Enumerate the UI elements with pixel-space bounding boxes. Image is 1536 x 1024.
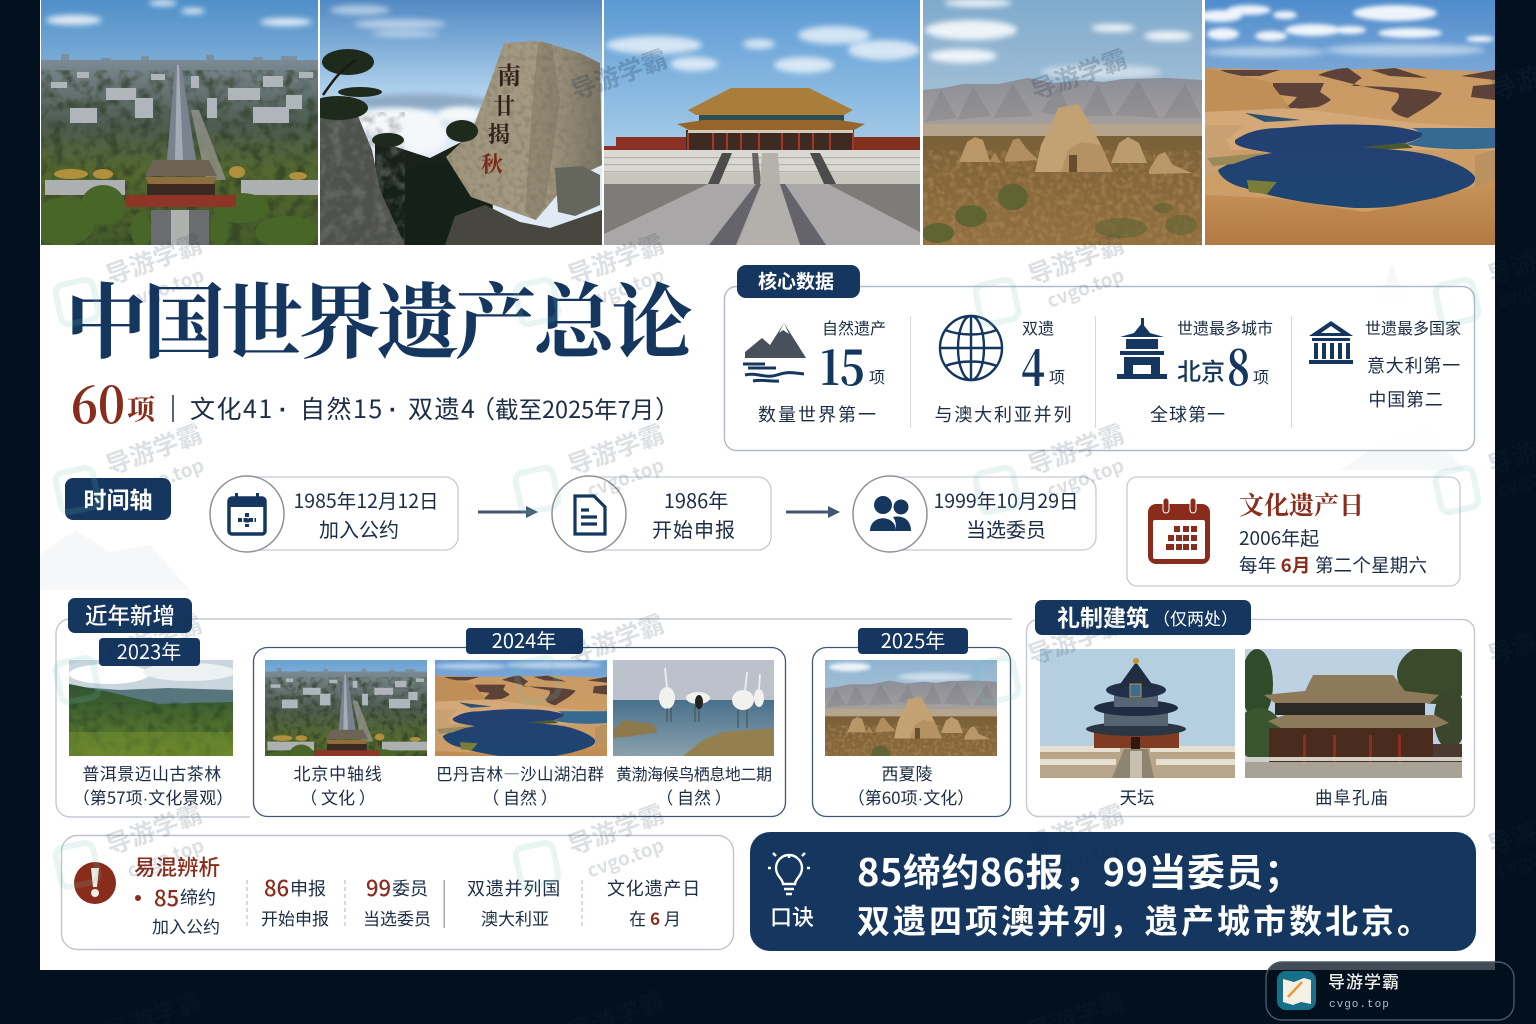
timeline step 1986: 1986年 [664, 485, 728, 514]
photo: central axis thumbnail [259, 636, 428, 781]
stat: natural heritage: 数量世界第一 [758, 401, 876, 427]
faint ink mountains background [40, 262, 1465, 590]
panel: easily confused: 澳大利亚 [481, 905, 549, 930]
photo: Mount Tai rock: 南 [497, 56, 521, 91]
panel: ritual architecture: 曲阜孔庙 [1315, 785, 1389, 810]
timeline step 1985 [210, 476, 458, 552]
watermarks: 导游学霸 [1022, 414, 1129, 483]
watermarks: 导游学霸 [1022, 604, 1129, 673]
panel: ritual architecture: 天坛 [1120, 785, 1154, 810]
summary line: 60 items: 项 [127, 388, 157, 428]
tag: core data [737, 265, 860, 298]
stat: top city: 北京 [1177, 352, 1225, 387]
photo: Western Xia thumbnail [824, 632, 997, 784]
panel: 2024 additions [254, 625, 786, 816]
stat: top city: 全球第一 [1150, 401, 1226, 427]
icon: warning [74, 862, 116, 904]
brand badge [1266, 962, 1514, 1020]
summary line: 60 items: · [389, 396, 397, 424]
watermarks: 导游学霸 [100, 794, 207, 863]
icon: mountain [743, 323, 806, 381]
panel: culture heritage day: 文化遗产日 [1239, 486, 1364, 522]
panel: easily confused: 开始申报 [261, 905, 329, 930]
stat: top country: 世遗最多国家 [1365, 315, 1461, 339]
icon: document [575, 496, 605, 534]
photo: dunes thumbnail [431, 635, 607, 781]
panel: easily confused: 易混辨析 [134, 851, 220, 882]
icon: pagoda [1117, 318, 1167, 379]
stat: natural heritage: 自然遗产 [822, 315, 886, 339]
summary line: 60 items: 文化41 [190, 390, 274, 426]
watermarks: cvgo.top [1043, 451, 1128, 504]
timeline step 1986: 开始申报 [652, 514, 736, 543]
photo: Badain Jaran dunes and lake [1198, 0, 1495, 245]
stat: top city: 8 [1227, 330, 1250, 399]
tag: core data: 核心数据 [758, 267, 834, 294]
arrow [786, 506, 840, 518]
summary line: 60 items: 自然15 [300, 390, 384, 426]
summary line: 60 items: · [279, 396, 287, 424]
tag: 2024 [466, 625, 583, 654]
brand badge: cvgo.top [1329, 999, 1390, 1011]
stat: mixed heritage: 4 [1021, 330, 1045, 399]
panel: 2025 additions: （第60项·文化） [848, 784, 974, 809]
photo: Temple of Heaven [1040, 649, 1235, 778]
panel: easily confused: 86 [264, 871, 289, 903]
stat: top city: 世遗最多城市 [1177, 315, 1273, 339]
panel: culture heritage day [1127, 477, 1460, 586]
photo: Jingmai tea forest [69, 660, 233, 756]
watermarks: cvgo.top [583, 261, 668, 314]
icon: people [870, 496, 911, 531]
watermarks: 导游学霸 [100, 414, 207, 483]
panel: 2025 additions: 西夏陵 [882, 760, 932, 785]
summary line: 60 items: ） [655, 390, 680, 426]
panel: mnemonic: 口诀 [770, 900, 814, 932]
panel: easily confused: 申报 [290, 875, 326, 901]
stat: natural heritage: 项 [869, 364, 885, 388]
panel: mnemonic: 双遗四项澳并列，遗产城市数北京。 [857, 895, 1430, 943]
panel: 2025 additions [812, 625, 1010, 816]
tag: ritual architecture: （仅两处） [1153, 605, 1238, 630]
panel: culture heritage day: 每年 6月 第二个星期六 [1239, 552, 1427, 578]
panel: easily confused: 文化遗产日 [607, 875, 701, 901]
watermarks: 导游学霸 [1022, 794, 1129, 863]
photo: Mount Tai rock: 秋 [481, 148, 503, 179]
watermarks: 导游学霸 [562, 414, 669, 483]
panel: easily confused: 委员 [392, 875, 428, 901]
panel: easily confused: 在 6 月 [629, 905, 681, 930]
panel: 2024 additions: 巴丹吉林—沙山湖泊群 [436, 761, 604, 785]
stat: mixed heritage [934, 315, 1072, 427]
panel: culture heritage day: 2006年起 [1239, 524, 1319, 551]
stat: mixed heritage: 与澳大利亚并列 [934, 401, 1072, 427]
tag: 2025 [858, 625, 968, 654]
stat: natural heritage: 15 [820, 330, 865, 399]
icon: globe [940, 316, 1002, 380]
arrow [478, 506, 538, 518]
panel: easily confused: 缔约 [180, 884, 216, 910]
watermarks: 导游学霸 [562, 224, 669, 293]
watermarks: cvgo.top [583, 451, 668, 504]
photo: Western Xia tombs [922, 0, 1202, 245]
photo: Mount Tai rock: 廿 [493, 90, 515, 121]
watermarks: 导游学霸 [100, 604, 207, 673]
group: 2023: 普洱景迈山古茶林 [82, 760, 222, 785]
watermarks: cvgo.top [123, 831, 208, 884]
tag: recent additions [68, 598, 192, 633]
tag: timeline [65, 478, 171, 520]
watermarks: cvgo.top [1043, 831, 1128, 884]
summary line: 60 items: （ [470, 390, 495, 426]
panel: easily confused: 85 [154, 881, 179, 913]
stat: mixed heritage: 项 [1049, 364, 1065, 388]
stat: mixed heritage: 双遗 [1022, 315, 1054, 339]
tag: 2023: 2023年 [117, 636, 181, 665]
title: 中国世界遗产总论 [65, 258, 693, 375]
watermarks: 导游学霸 [100, 224, 207, 293]
timeline step 1985: 1985年12月12日 [293, 485, 439, 514]
stat: top country [1309, 315, 1461, 412]
watermarks: cvgo.top [123, 451, 208, 504]
summary line: 60 items: 双遗4 [408, 390, 476, 426]
photo: Mount Tai rock: 揭 [488, 118, 510, 149]
brand badge: 导游学霸 [1328, 968, 1400, 993]
stat: top city: 项 [1253, 364, 1269, 388]
group: 2023 [69, 636, 235, 809]
icon: temple [1309, 321, 1353, 364]
panel: 2024 additions: （ 自然 ） [482, 784, 558, 809]
icon: light bulb [768, 853, 810, 894]
panel: easily confused: 当选委员 [363, 905, 431, 930]
panel: easily confused: 99 [366, 871, 391, 903]
tag: 2025: 2025年 [881, 625, 945, 654]
summary line: 60 items: 截至2025年7月 [495, 391, 654, 425]
panel: mnemonic: 85缔约86报，99当委员； [857, 842, 1302, 897]
tag: 2023 [99, 636, 200, 666]
watermarks: 导游学霸 [1022, 224, 1129, 293]
photo: cranes [613, 660, 774, 756]
panel: easily confused [62, 836, 734, 950]
panel: core data [724, 265, 1474, 450]
watermarks: 导游学霸 [562, 794, 669, 863]
panel: recent additions [56, 598, 1012, 817]
timeline step 1999: 当选委员 [966, 514, 1046, 543]
icon: calendar [229, 493, 265, 534]
watermarks: 导游学霸 [565, 39, 672, 108]
panel: 2024 additions: 黄渤海候鸟栖息地二期 [616, 761, 772, 785]
panel: mnemonic [750, 832, 1476, 951]
stat: natural heritage [743, 315, 886, 427]
timeline step 1999: 1999年10月29日 [933, 485, 1079, 514]
panel: easily confused: 双遗并列国 [467, 875, 561, 901]
tag: timeline: 时间轴 [84, 481, 152, 515]
photo: Mount Tai rock [308, 0, 602, 256]
icon: red calendar [1148, 498, 1210, 564]
watermarks: cvgo.top [1043, 261, 1128, 314]
tag: recent additions: 近年新增 [85, 599, 175, 631]
tag: 2024: 2024年 [492, 625, 556, 654]
timeline step 1985: 加入公约 [319, 514, 399, 543]
summary line: 60 items: 60 [71, 366, 125, 438]
watermarks: 导游学霸 [562, 604, 669, 673]
panel: 2024 additions: （ 自然 ） [656, 784, 732, 809]
photo: Beijing central axis [31, 0, 319, 248]
panel: ritual architecture [1026, 599, 1474, 816]
tag: ritual architecture [1035, 599, 1251, 635]
panel: easily confused: 加入公约 [152, 913, 220, 938]
photo: Forbidden City hall [604, 0, 920, 245]
watermarks: cvgo.top [123, 261, 208, 314]
panel: 2024 additions: （ 文化 ） [300, 784, 376, 809]
summary line: 60 items [71, 366, 680, 438]
group: 2023: （第57项·文化景观） [73, 784, 233, 809]
timeline step 1986 [552, 476, 771, 552]
tag: ritual architecture: 礼制建筑 [1057, 599, 1149, 633]
watermarks: cvgo.top [583, 831, 668, 884]
panel: 2024 additions: 北京中轴线 [294, 760, 382, 785]
watermarks: 导游学霸 [1025, 39, 1132, 108]
timeline step 1999 [853, 476, 1096, 552]
stat: top country: 意大利第一 [1367, 352, 1461, 378]
icon: brand map [1277, 971, 1316, 1010]
photo: Confucius Temple [1245, 649, 1462, 778]
stat: top city [1117, 315, 1273, 427]
stat: top country: 中国第二 [1368, 386, 1444, 412]
